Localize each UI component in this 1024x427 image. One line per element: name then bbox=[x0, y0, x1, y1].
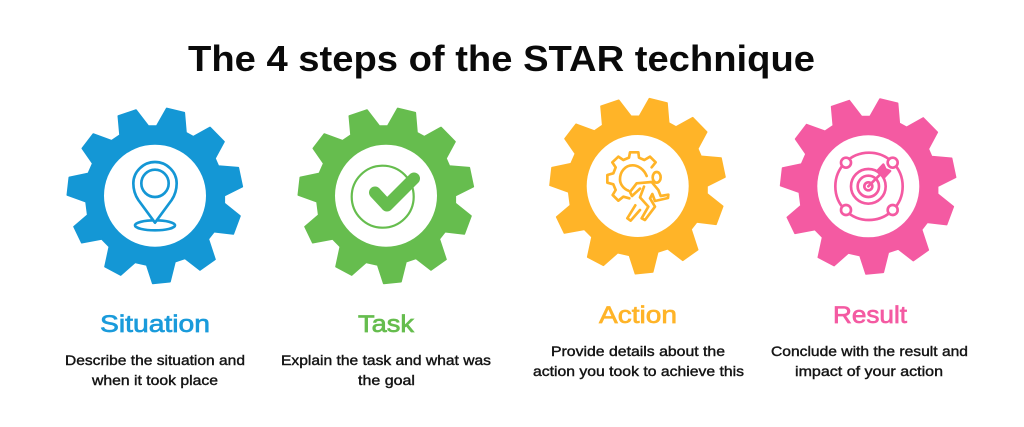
description: situation: Describe the situation and bbox=[65, 352, 245, 368]
description: result: impact of your action bbox=[795, 363, 943, 379]
panel: action bbox=[533, 99, 744, 379]
title: The 4 steps of the STAR technique bbox=[188, 38, 815, 79]
gear: situation bbox=[67, 108, 242, 283]
icon: map pin bbox=[133, 162, 177, 230]
description: result bbox=[771, 343, 968, 379]
description: action: Provide details about the bbox=[551, 343, 725, 359]
gear: action bbox=[550, 99, 725, 274]
description: situation bbox=[65, 352, 245, 388]
panel: result bbox=[771, 99, 968, 379]
description: situation: when it took place bbox=[91, 372, 218, 388]
description: action bbox=[533, 343, 744, 379]
panel: situation bbox=[65, 108, 245, 388]
description: task: Explain the task and what was bbox=[281, 352, 491, 368]
description: action: action you took to achieve this bbox=[533, 363, 744, 379]
description: result: Conclude with the result and bbox=[771, 343, 968, 359]
icon: runner with gear bbox=[607, 152, 668, 221]
heading: action: Action bbox=[599, 302, 677, 329]
icon: check mark bbox=[352, 166, 414, 228]
description: task bbox=[281, 352, 491, 388]
gear: task bbox=[298, 108, 473, 283]
icon: target with arrow bbox=[835, 153, 903, 220]
description: task: the goal bbox=[358, 372, 415, 388]
gear: result bbox=[781, 99, 956, 274]
heading: situation: Situation bbox=[100, 311, 210, 338]
heading: result: Result bbox=[833, 302, 907, 329]
heading: task: Task bbox=[358, 311, 415, 338]
panel: task bbox=[281, 108, 491, 388]
